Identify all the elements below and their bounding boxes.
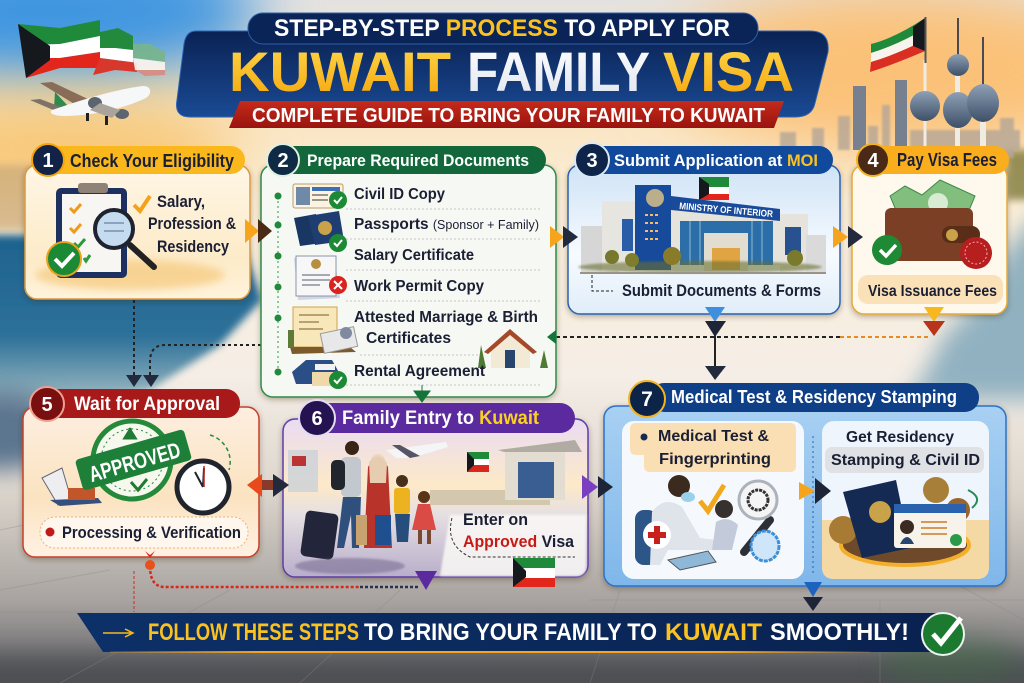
title block — [177, 13, 828, 128]
card — [852, 165, 1007, 314]
sub-panel: medical: Medical Test & — [658, 428, 769, 445]
text: Visa Issuance Fees: Visa Issuance Fees — [868, 283, 997, 300]
text: Passports: Passports (Sponsor + Family) — [354, 216, 539, 233]
arrow: step 6 to step 7 — [582, 475, 613, 499]
arrow: medical to residency — [799, 478, 831, 504]
banner text middle: TO BRING YOUR FAMILY TO — [364, 619, 657, 646]
text: Processing and Verification: Processing & Verification — [62, 523, 241, 542]
icon: clipboard with magnifier — [47, 183, 154, 278]
title word VISA: VISA — [663, 40, 794, 103]
number badge — [299, 400, 335, 436]
header bar — [32, 146, 245, 174]
number: 2 — [277, 150, 289, 172]
number badge — [30, 387, 64, 421]
arrow: step 7 down — [803, 582, 823, 611]
banner word Kuwait: KUWAIT — [665, 619, 762, 646]
banner shape — [77, 613, 940, 652]
number: 3 — [586, 150, 598, 172]
subtitle text: COMPLETE GUIDE TO BRING YOUR FAMILY TO KUWAIT — [252, 105, 765, 127]
icon: book — [42, 468, 102, 506]
card — [568, 165, 840, 314]
panel: step 1 eligibility — [25, 144, 250, 299]
right bottom caption area — [440, 515, 586, 576]
sub-panel: medical: Fingerprinting — [659, 451, 771, 468]
skyline and Kuwait Towers — [780, 18, 1020, 160]
header bar — [580, 146, 833, 174]
sub-panel: medical — [622, 421, 804, 579]
arrow: step 1 to step 2 — [245, 219, 272, 243]
text: Enter on Approved Visa: Approved Visa — [463, 532, 575, 551]
connectors — [126, 300, 930, 612]
text: Work Permit Copy: Work Permit Copy — [354, 278, 484, 295]
number badge — [267, 144, 299, 176]
icon: clock — [177, 435, 230, 513]
title top pill — [248, 13, 758, 44]
title main plate — [177, 31, 828, 117]
text: Attested Marriage and Birth Certificates: Attested Marriage & Birth — [354, 309, 538, 326]
small dashed curve — [450, 518, 575, 557]
text: Attested Marriage and Birth Certificates: Certificates — [366, 330, 451, 347]
panel: step 4 visa fees — [852, 144, 1009, 314]
arrow: step 6 marker — [415, 571, 437, 590]
sub-panel: residency: Get Residency — [846, 429, 954, 446]
header bar — [40, 389, 240, 418]
icon: Kuwait flag bottom — [513, 558, 555, 587]
eligibility text: Residency — [157, 237, 229, 256]
arrow: step 2 back connector — [547, 330, 556, 344]
header bar — [272, 146, 546, 174]
card — [25, 165, 250, 299]
card — [261, 165, 556, 397]
card — [604, 406, 1006, 586]
icon: airplane — [30, 82, 150, 125]
number: 7 — [641, 388, 653, 411]
icon: airplane small — [386, 442, 448, 458]
header bar — [650, 383, 979, 412]
icon: rental house — [292, 360, 347, 389]
heading: Check Your Eligibility — [70, 151, 234, 171]
eligibility text — [148, 192, 236, 256]
title line 1: STEP-BY-STEP PROCESS TO APPLY FOR — [274, 15, 730, 42]
title word FAMILY: FAMILY — [467, 40, 650, 103]
icon: wallet with money — [872, 180, 992, 269]
panel: step 6 family entry — [283, 400, 588, 587]
arrow: step 4 down — [923, 307, 945, 336]
icon: civil ID — [293, 184, 347, 209]
text: Enter on Approved Visa: Enter on — [463, 510, 528, 529]
icon: Ministry of Interior building: MINISTRY OF INTERIOR — [679, 201, 773, 220]
icon: airport terminal — [288, 440, 582, 505]
title word KUWAIT: KUWAIT — [229, 40, 451, 103]
icon: Kuwait flag upper left — [18, 20, 165, 78]
icon: doctor with patient and fingerprint — [635, 475, 779, 570]
icon: certificate stack — [294, 256, 347, 300]
icon: approved stamp — [75, 421, 192, 499]
icon: Kuwait flag upper right — [870, 17, 926, 72]
arrow: step 3 to step 4 — [833, 226, 863, 248]
heading: Medical Test & Residency Stamping — [671, 387, 957, 407]
text: Salary Certificate: Salary Certificate — [354, 247, 474, 264]
icon: approved stamp: APPROVED — [86, 437, 183, 487]
arrow: step 3 down — [705, 307, 726, 337]
icon: passports — [294, 211, 347, 252]
text: Rental Agreement: Rental Agreement — [354, 363, 486, 380]
panel: step 5 approval — [23, 387, 259, 557]
card — [23, 407, 259, 557]
number badge — [32, 144, 64, 176]
icon: Ministry of Interior building — [578, 185, 826, 274]
heading: Pay Visa Fees — [897, 150, 997, 170]
number: 1 — [42, 150, 54, 172]
arrow: step 5 down marker — [145, 551, 155, 570]
subtitle ribbon — [229, 101, 784, 128]
icon: marriage and birth certificates — [288, 307, 358, 354]
processing pill — [40, 517, 248, 548]
small arrow — [103, 629, 133, 637]
header bar — [865, 146, 1009, 174]
arrow: step 2 to step 6 — [414, 385, 430, 402]
icon: passport coins and ID card — [829, 477, 977, 565]
sub-panel: residency: Stamping & Civil ID — [831, 452, 980, 469]
card — [283, 419, 588, 577]
sub-panel: residency — [822, 421, 989, 579]
heading: Wait for Approval — [74, 394, 220, 415]
gold underline — [110, 651, 870, 653]
small dashed arrow — [592, 275, 613, 291]
heading: Submit Application at MOI — [614, 151, 818, 170]
header bar — [310, 403, 575, 433]
number badge — [629, 381, 665, 417]
timeline dots — [274, 192, 282, 376]
number badge — [575, 143, 609, 177]
eligibility text: Profession & — [148, 214, 236, 233]
icon: house right — [478, 329, 548, 368]
panel: step 3 submit at MOI — [568, 143, 840, 314]
banner text gold: FOLLOW THESE STEPS — [148, 619, 359, 646]
divider — [812, 436, 814, 573]
closing banner — [77, 613, 964, 655]
number badge — [857, 144, 889, 176]
text: Enter on Approved Visa — [463, 510, 575, 551]
panel: step 2 documents — [261, 144, 556, 397]
text: Attested Marriage and Birth Certificates — [354, 309, 538, 347]
bullet — [46, 528, 54, 536]
eligibility text: Salary, — [157, 192, 205, 211]
fees pill — [858, 275, 1003, 304]
number: 6 — [311, 408, 323, 430]
text: Civil ID Copy: Civil ID Copy — [354, 186, 445, 203]
heading: Prepare Required Documents — [307, 151, 529, 170]
panel: step 7 medical and residency — [604, 381, 1006, 586]
arrow: step 2 to step 3 — [550, 226, 578, 248]
number: 4 — [867, 150, 879, 172]
arrow: steps 5 and 6 — [247, 474, 289, 497]
text: Submit Documents and Forms: Submit Documents & Forms — [622, 281, 821, 300]
heading: Family Entry to Kuwait — [342, 408, 540, 429]
number: 5 — [41, 394, 53, 416]
icon: Kuwait flag on building — [699, 177, 729, 200]
icon: family walking with luggage — [295, 441, 436, 574]
banner word smoothly: SMOOTHLY! — [770, 619, 909, 646]
icon: check badge — [922, 613, 964, 655]
